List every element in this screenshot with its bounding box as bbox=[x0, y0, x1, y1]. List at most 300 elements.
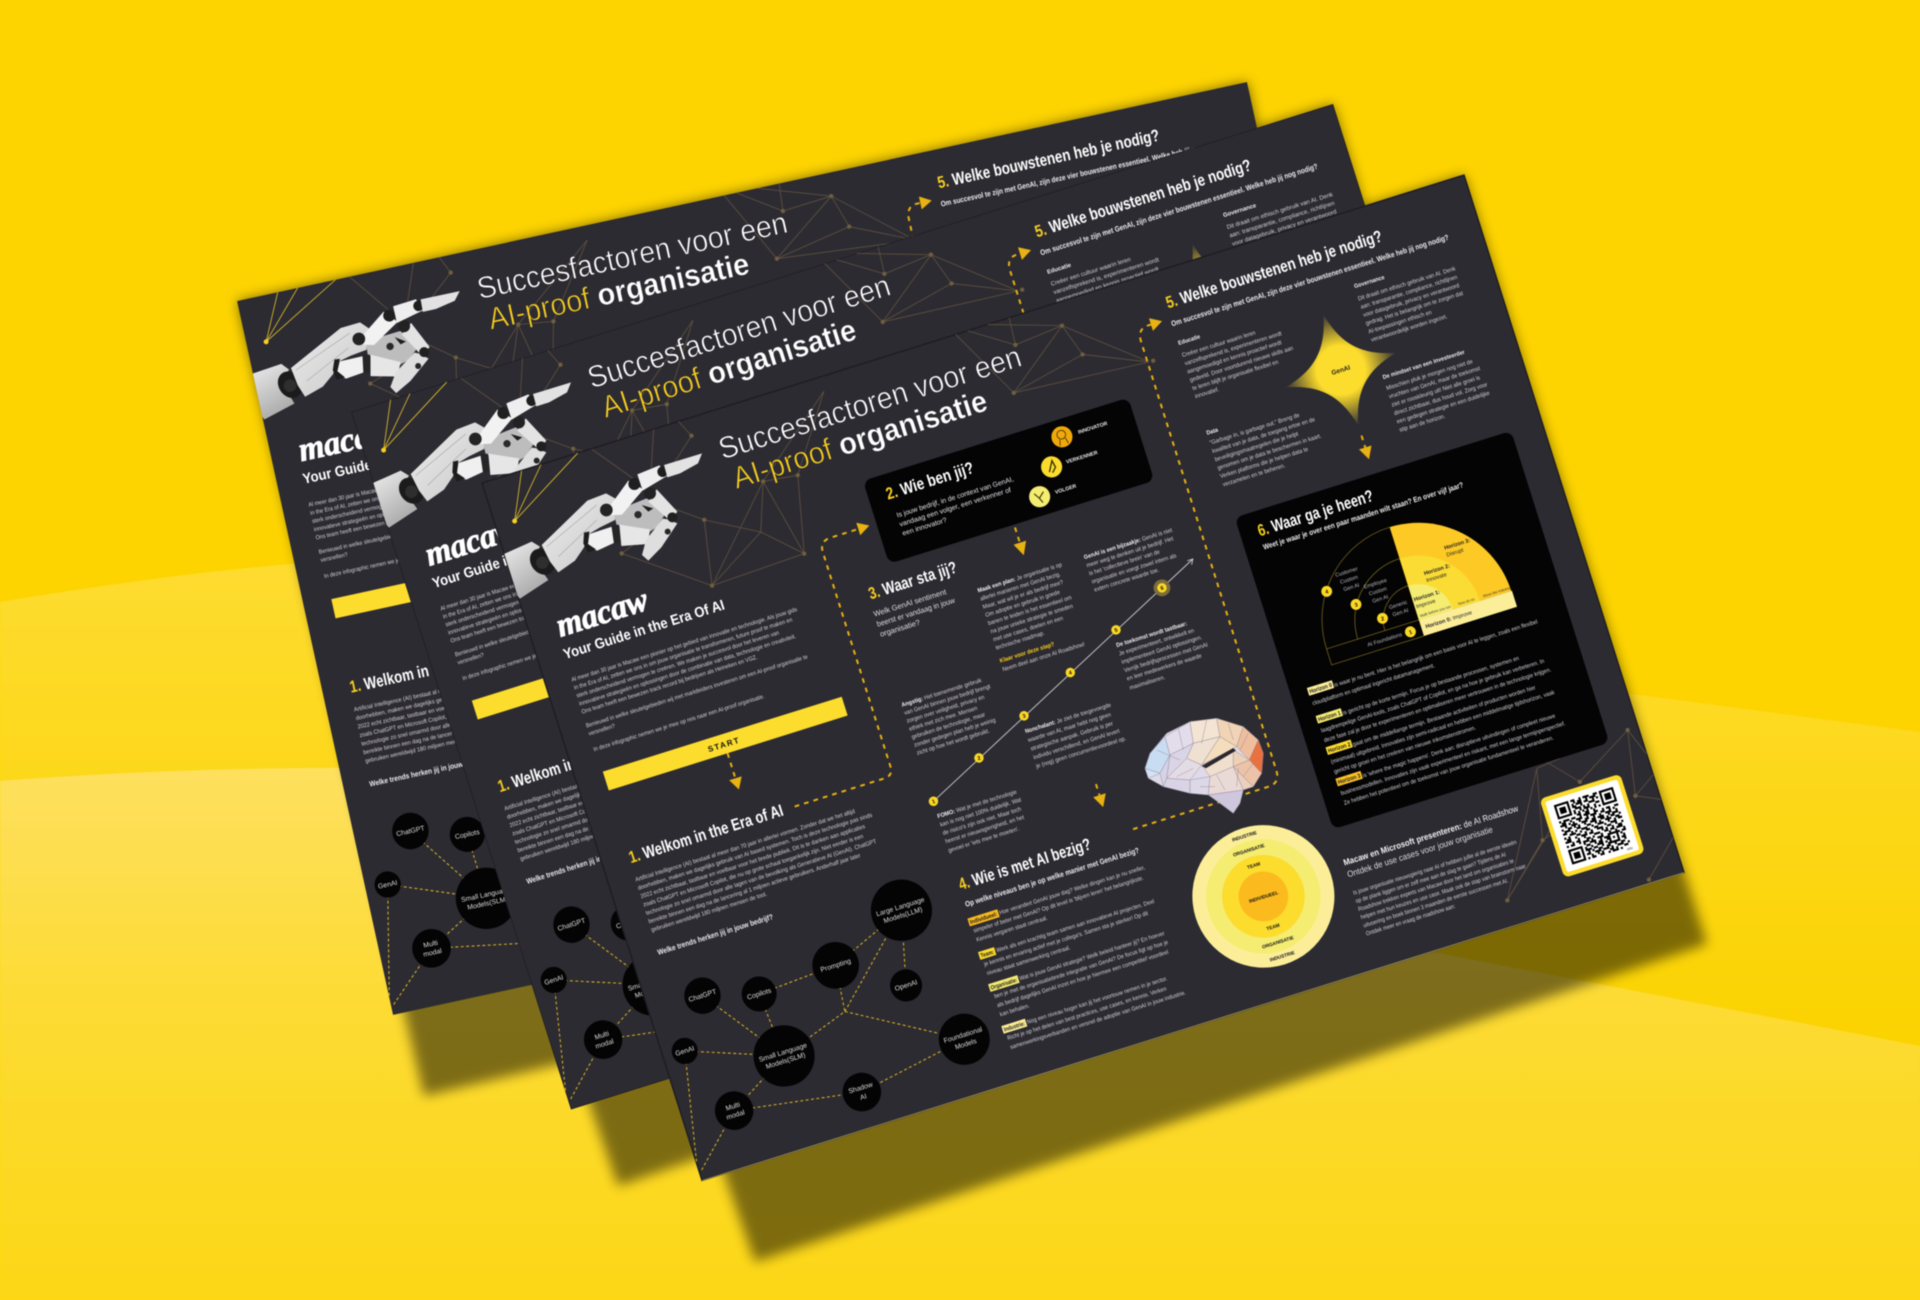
arrow bbox=[906, 196, 932, 236]
start bar: START bbox=[576, 664, 610, 683]
logo and tagline: macaw bbox=[552, 581, 653, 645]
horizon 2 text: Horizon 2 bbox=[1328, 742, 1352, 755]
icon: robot hand bbox=[371, 382, 571, 528]
body text: doorhebben, maken we dagelijks gebruik van AI based systemen. Toch is deze technologie pas sinds bbox=[637, 813, 873, 892]
bubble labels bbox=[653, 892, 992, 1151]
welkom text: Artificial Intelligence (AI) bestaat al meer dan 70 jaar in allerlei vormen. Zonder dat we het altijd bbox=[353, 658, 581, 714]
chart: concentric circles: INDUSTRIE bbox=[1269, 950, 1296, 964]
bubble labels: Shadow bbox=[848, 1081, 875, 1096]
block: educatie: innovatief. bbox=[1194, 387, 1220, 400]
bubble labels: GenAI bbox=[377, 880, 398, 891]
panel: section 6 waar ga je heen bbox=[1235, 431, 1609, 829]
chart: concentric circles: ORGANISATIE bbox=[1232, 843, 1266, 859]
start bar: START bbox=[707, 735, 741, 754]
chart: concentric circles bbox=[1174, 807, 1353, 986]
bubble labels: GenAI bbox=[544, 974, 564, 987]
logo and tagline: Your Guide in the Era Of AI bbox=[430, 527, 596, 592]
question bbox=[872, 585, 960, 639]
educatie and governance text: aangemoedigd en kennis proactief wordt bbox=[1056, 267, 1160, 304]
start bar bbox=[471, 678, 550, 720]
maturity line chart: 1 bbox=[931, 799, 936, 806]
chart: horizons: Horizon 0: Improve bbox=[1425, 610, 1473, 630]
welkom text: technologie zo snel omarmd door alle lagen van de bevolking als Generatieve AI (GenAI). ChatGPT bbox=[361, 690, 600, 748]
text: maak een plan: banen te leiden is het essentieel om bbox=[987, 595, 1073, 627]
welkom text: doorhebben, maken we dagelijks gebruik van AI based systemen. Toch is deze technologie pas sinds bbox=[355, 664, 598, 722]
level: individueel: Individueel: bbox=[969, 912, 998, 926]
horizon 2 text: gericht op groei en het creëren van nieuwe inkomstenstromen. bbox=[1333, 725, 1477, 776]
body text: gebruiken wereldwijd 180 miljoen mensen de tool. bbox=[651, 891, 768, 934]
text: bijzaakje: GenAI is een bijzaakje: GenAI is niet bbox=[1083, 528, 1174, 561]
block: mindset: stip aan de horizon. bbox=[1399, 414, 1447, 434]
educatie and governance text: aan: transparantie, compliance, richtlijnen bbox=[1229, 201, 1336, 239]
arrow: section 1 to section 2 bbox=[719, 519, 943, 807]
title bbox=[588, 280, 891, 418]
text: maak een plan: Maar, wat wil je er als bedrijf mee? bbox=[982, 580, 1064, 611]
level: industrie: Nog een niveau hoger kan jij het voortouw nemen in je sector. bbox=[1026, 976, 1169, 1026]
text: vandaag een volger, een verkenner of bbox=[899, 487, 1012, 529]
heading: 2. Wie ben jij? bbox=[883, 458, 976, 504]
block: data: Verken platforms die je helpen data te bbox=[1220, 447, 1309, 480]
chart: horizons bbox=[1297, 498, 1517, 665]
chart: horizons: Gen AI bbox=[1372, 594, 1389, 605]
text: maak een plan: na jouw unieke strategie te smeden bbox=[990, 604, 1074, 635]
chart: concentric circles: INDIVIDUEEL bbox=[1248, 890, 1279, 905]
block: data: genomen om je data te beschermen in kaart. bbox=[1217, 433, 1323, 472]
qr code bbox=[1539, 774, 1645, 878]
maturity line chart: 3 bbox=[1022, 713, 1027, 720]
text: fomo bbox=[937, 789, 1031, 854]
educatie and governance text: vanzelfsprekend is, experimenteren wordt bbox=[1053, 257, 1160, 296]
bubble labels: GenAI bbox=[675, 1045, 695, 1058]
level: individueel bbox=[967, 863, 1152, 944]
text: fomo: gevoel er 'iets mee te moeten'. bbox=[948, 826, 1021, 854]
star bbox=[1192, 246, 1202, 260]
level: organisatie: Organisatie: bbox=[990, 978, 1018, 992]
title: AI-proof organisatie bbox=[597, 313, 860, 425]
level: organisatie: Wat is jouw GenAI strategie? Welk beleid hanteer jij? En hoever bbox=[1019, 931, 1166, 982]
bubble labels: ChatGPT bbox=[688, 988, 718, 1004]
level: individueel: Hoe verandert GenAI jouw dag? Welke dingen kan je nu sneller, bbox=[999, 865, 1146, 917]
chart: horizons: Generic bbox=[1388, 600, 1408, 611]
bubble labels: modal bbox=[595, 1038, 615, 1051]
icon: robot hand bbox=[502, 453, 702, 599]
intro text: innovatieve strategieën en oplossingen door de combinatie van data, technologie en creativiteit. bbox=[447, 563, 666, 637]
welkom text: gebruiken wereldwijd 180 miljoen mensen de tool. bbox=[365, 733, 485, 765]
block: mindset: vruchten van GenAI, maar de toekomst bbox=[1388, 366, 1481, 400]
text: angstig: zicht op hoe het wordt gebruikt. bbox=[916, 728, 991, 757]
start bar bbox=[603, 697, 848, 790]
intro text: Al meer dan 30 jaar is Macaw een pionier op het gebied van innovatie en technologie. Als jouw gids bbox=[308, 452, 541, 509]
intro text: innovatieve strategieën en oplossingen door de combinatie van data, technologie en creativiteit. bbox=[313, 479, 538, 533]
panel: middle poster bbox=[352, 103, 1366, 1110]
block: governance bbox=[1353, 254, 1470, 344]
intro text: Al meer dan 30 jaar is Macaw een pionier op het gebied van innovatie en technologie. Als jouw gids bbox=[571, 607, 798, 684]
level: organisatie: ben je met de organisatiebrede integratie van GenAI? De focus ligt op hoe je bbox=[994, 940, 1169, 1000]
level: industrie: samenwerkingsverbanden en versnel de adoptie van GenAI in jouw industrie. bbox=[1010, 990, 1187, 1051]
title: AI-proof organisatie bbox=[485, 246, 752, 337]
block: governance: AI-toepassingen ethisch en bbox=[1368, 310, 1433, 336]
chart: horizons: Customer bbox=[1335, 566, 1359, 579]
chart: horizons: Horizon 1: bbox=[1413, 589, 1441, 603]
welkom text: bereikte binnen een dag na de lancering al 1 miljoen actieve gebruikers. Anderhalf jaar later bbox=[517, 782, 731, 854]
bubble labels: Models bbox=[954, 1038, 978, 1051]
text: bijzaakje: is het 'collectieve brein' van de bbox=[1088, 549, 1161, 577]
body text: 2022 echt zichtbaar, tastbaar en voelbaar voor het brede publiek. Dit is te danken aan applicaties bbox=[640, 824, 866, 900]
educatie and governance text: Dit draait om ethisch gebruik van AI. Denk bbox=[1226, 192, 1334, 231]
title bbox=[478, 216, 788, 330]
body text bbox=[635, 804, 887, 934]
text: maak een plan: technische roadmap. bbox=[995, 630, 1046, 652]
intro text: Ons team heeft een bewezen track record bij bedrijven als Heineken en VGZ. bbox=[315, 496, 497, 542]
intro text: versnellen? bbox=[588, 723, 616, 738]
text: fomo: de risico's zijn ook niet. Maar toch bbox=[942, 806, 1022, 837]
bubble labels: Copilots bbox=[746, 987, 773, 1002]
panel: section 4 wie is met AI bezig bbox=[954, 769, 1353, 1052]
chart: horizons: Innovate bbox=[1426, 572, 1448, 584]
bubble labels: Small Language bbox=[758, 1042, 808, 1064]
block: data: kwaliteit van je data, de toegang ertoe en de bbox=[1212, 417, 1316, 455]
trend network links bbox=[642, 904, 979, 1172]
text: maak een plan: met use cases, doelen en een bbox=[992, 616, 1064, 644]
level: industrie: Richt je op het delen van best practices, use cases, en kennis. Verken bbox=[1007, 986, 1167, 1042]
icon: verkenner: VERKENNER bbox=[1065, 450, 1099, 466]
intro text: Benieuwd in welke sleutelgebieden wij met marktleiders investeren om een AI-proof organisatie te bbox=[454, 583, 678, 659]
intro text: Ons team heeft een bewezen track record bij bedrijven als Heineken en VGZ. bbox=[450, 583, 628, 645]
title: Succesfactoren voor een bbox=[474, 205, 791, 306]
level: organisatie bbox=[988, 929, 1175, 1019]
body text: technologie zo snel omarmd door alle lagen van de bevolking als Generatieve AI (GenAI). ChatGPT bbox=[645, 839, 878, 917]
block: data: beveiligingsmaatregelen die je helpt bbox=[1214, 431, 1300, 463]
intro text: Benieuwd in welke sleutelgebieden wij met marktleiders investeren om een AI-proof organisatie te bbox=[585, 654, 809, 730]
welkom text bbox=[504, 784, 594, 862]
bubble labels: modal bbox=[423, 948, 443, 959]
horizon 0 text: Horizon 0 bbox=[1309, 683, 1333, 695]
intro text: In deze infographic nemen we je mee op reis naar een AI-proof organisatie. bbox=[462, 623, 635, 682]
heading: bouwstenen: 5. Welke bouwstenen heb je nodig? bbox=[936, 126, 1161, 192]
bubble labels: Multi bbox=[594, 1030, 610, 1042]
block: governance: aan: transparantie, compliance, richtlijnen bbox=[1360, 275, 1458, 311]
chart: horizons: Disrupt bbox=[1446, 548, 1465, 559]
start bar: START bbox=[438, 575, 472, 591]
roadshow heading: Ontdek de use cases voor jouw organisatie bbox=[1346, 824, 1494, 879]
heading: 4. Wie is met AI bezig? bbox=[956, 835, 1093, 894]
block: governance: Governance bbox=[1353, 275, 1386, 290]
text: bijzaakje: meer weg te denken uit je bedrijf. Het bbox=[1086, 536, 1175, 569]
roadshow body: Ontdek meer en vraag de roadshow aan: bbox=[1365, 904, 1457, 938]
chart: horizons: Custom bbox=[1339, 574, 1359, 586]
icon: innovator bbox=[1049, 412, 1110, 450]
text: een innovator? bbox=[902, 517, 948, 538]
chart: horizons: 3 bbox=[1354, 602, 1359, 609]
bubble labels: Prompting bbox=[820, 958, 852, 974]
block: governance: voor datagebruik, privacy en verantwoord bbox=[1363, 283, 1460, 319]
text: maak een plan bbox=[977, 562, 1088, 673]
question: beerst er vandaag in jouw bbox=[876, 596, 956, 629]
heading: 3. Waar sta jij? bbox=[866, 558, 959, 603]
bubble labels: Small Language bbox=[627, 971, 677, 993]
horizon 0 text: is waar je nu bent. Hier is het belangrijk om een basis voor AI te leggen, zoals een flexibel bbox=[1333, 619, 1539, 689]
roadshow body bbox=[1352, 839, 1532, 938]
heading: 6. Waar ga je heen? bbox=[1255, 486, 1376, 540]
body text: Artificial Intelligence (AI) bestaat al meer dan 70 jaar in allerlei vormen. Zonder dat we het altijd bbox=[635, 809, 856, 884]
block: data: Data bbox=[1206, 427, 1220, 437]
text: angstig: gebruiken de technologie, maar bbox=[911, 712, 986, 741]
poster drop shadows bbox=[237, 82, 1707, 1262]
panel: section 1 welkom bbox=[600, 762, 1003, 1172]
horizon 3 text: is 'where the magic happens'. Denk aan: disruptieve uitvindingen of compleet nieuwe bbox=[1362, 713, 1556, 780]
text: angstig: ethiek met zich mee. Mensen bbox=[908, 706, 978, 733]
text: angstig bbox=[901, 676, 1004, 757]
logo and tagline: macaw bbox=[421, 510, 522, 574]
horizon 0 text: cloudplatform en optimaal ingericht datamanagement. bbox=[1312, 663, 1436, 707]
bubble labels: Multi bbox=[725, 1101, 741, 1113]
title: AI-proof organisatie bbox=[728, 384, 991, 496]
chart: horizons: 2 bbox=[1381, 616, 1385, 623]
maturity line chart bbox=[883, 559, 1240, 807]
text: maak een plan: Neem deel aan onze AI Roadshow! bbox=[1002, 642, 1086, 673]
arrow: start to section 1 bbox=[721, 751, 745, 791]
chart: concentric circles: ORGANISATIE bbox=[1261, 935, 1295, 951]
roadshow body: helpen met hun keuzes en use case. Maak ook de stap van brainstorm naar bbox=[1360, 864, 1527, 921]
level: industrie: Industrie: bbox=[1003, 1021, 1026, 1033]
block: mindset: De mindset van een investeerder bbox=[1382, 349, 1466, 381]
intro text: sterk onderscheidend vermogen te creëren. We maken je succesvol door het leveren van bbox=[445, 559, 649, 629]
text: toekomst: en leer medewerkers de waarde bbox=[1126, 653, 1203, 683]
block: data: "Garbage in, is garbage out." Breng de bbox=[1209, 413, 1301, 447]
icon: robot hand bbox=[246, 273, 460, 436]
level: individueel: simpeler of beter met GenAI? Op dit level is 'blijven leren' het belangrijkste. bbox=[973, 875, 1145, 935]
logo and tagline bbox=[298, 433, 370, 484]
level: organisatie: als bedrijf dagelijks GenAI inzet en hoe je hiermee een competitief voordeel bbox=[996, 950, 1169, 1009]
level: individueel: Kennis vergaren staat centraal. bbox=[976, 915, 1049, 944]
block: governance: verantwoordelijk worden ingezet. bbox=[1370, 314, 1449, 344]
block: data bbox=[1206, 398, 1328, 489]
text: Is jouw bedrijf, in de context van GenAI, bbox=[896, 476, 1015, 519]
text: maak een plan: Maak een plan: Je organisatie is op bbox=[977, 562, 1063, 595]
block: educatie bbox=[1178, 309, 1299, 400]
icon: innovator: INNOVATOR bbox=[1077, 421, 1109, 436]
bubble labels: Large Language bbox=[875, 896, 926, 918]
level: organisatie: kan behalen. bbox=[999, 1003, 1031, 1018]
start bar bbox=[330, 582, 412, 619]
arrow: section 4 to section 5 bbox=[988, 315, 1305, 829]
text: bijzaakje bbox=[1083, 528, 1184, 594]
text: toekomst: De toekomst wordt tastbaar: bbox=[1116, 621, 1188, 649]
intro text: in the Era of AI, zetten we ons in om jouw organisatie te transformeren, future proof te maken en bbox=[573, 617, 793, 692]
educatie and governance text: Governance bbox=[1223, 203, 1258, 219]
text: nonchalant: waarde van AI, maar hebt nog geen bbox=[1026, 712, 1112, 744]
question: organisatie? bbox=[879, 618, 921, 639]
bubble labels: Models(LLM) bbox=[883, 906, 923, 925]
level: team: Team: bbox=[980, 950, 995, 960]
bubble labels: Models(SLM) bbox=[467, 896, 509, 912]
block: educatie: vanzelfsprekend is, experimenteren wordt bbox=[1184, 331, 1283, 367]
text: nonchalant bbox=[1024, 701, 1127, 770]
bubble labels: Models(SLM) bbox=[765, 1052, 806, 1071]
bubble labels: Foundational bbox=[943, 1026, 984, 1045]
chart: concentric circles: INDUSTRIE bbox=[1231, 830, 1259, 844]
text: nonchalant: individu verschillend, en GenAI levert bbox=[1033, 728, 1121, 761]
bubble labels: Copilots bbox=[454, 829, 481, 841]
arrow: section 3 to section 4 bbox=[1090, 782, 1109, 809]
intro text: Al meer dan 30 jaar is Macaw een pionier op het gebied van innovatie en technologie. Als jouw gids bbox=[440, 536, 667, 613]
text: toekomst: maximaliseren. bbox=[1129, 675, 1166, 692]
block: educatie: gedeeld. Door voortdurend nieuwe skills aan bbox=[1189, 346, 1294, 384]
bouwstenen sub: Om succesvol te zijn met GenAI, zijn deze vier bouwstenen essentieel. Welke heb jij nog nodig? bbox=[1039, 162, 1319, 257]
welkom text: zoals ChatGPT en Microsoft Copilot, die nu op grote schaal toegankelijk zijn. Niet eerder is een bbox=[359, 684, 587, 739]
text: toekomst: Je experimenteert, ontwikkelt en bbox=[1118, 628, 1195, 658]
block: educatie: te leren blijft je organisatie flexibel en bbox=[1192, 359, 1279, 392]
horizon 3 text: Horizon 3 bbox=[1337, 773, 1362, 786]
title: Succesfactoren voor een bbox=[715, 340, 1026, 466]
heading: 5. Welke bouwstenen heb je nodig? bbox=[1163, 227, 1385, 312]
intro text: Ons team heeft een bewezen track record bij bedrijven als Heineken en VGZ. bbox=[581, 654, 759, 716]
block: data: verzamelen en te beheren. bbox=[1222, 463, 1287, 489]
trends question: Welke trends herken jij in jouw bedrijf? bbox=[369, 754, 489, 789]
block: mindset: Misschien pluk je morgen nog niet de bbox=[1386, 359, 1474, 392]
bubble labels: Multi bbox=[423, 940, 439, 950]
text: toekomst: Verrijk bedrijfsprocessen met GenAI bbox=[1124, 642, 1209, 674]
text: bijzaakje: extern concrete waarde toe. bbox=[1094, 567, 1161, 594]
horizon 3 text: businessmodellen. Innovaties zijn vaak experimenteel en riskant, met een lange termijnperspectief. bbox=[1340, 721, 1567, 797]
level: team: niveau staat samenwerking centraal. bbox=[986, 945, 1072, 977]
horizon 1 text: is gericht op de korte termijn. Focus je op bestaande processen, systemen en bbox=[1342, 656, 1520, 717]
bubble labels: modal bbox=[726, 1109, 746, 1122]
welkom text: gebruiken wereldwijd 180 miljoen mensen de tool. bbox=[520, 820, 637, 863]
horizon 0 text bbox=[1307, 616, 1542, 708]
block: mindset: direct zichtbaar, dus houd vol. Zorg voor bbox=[1394, 382, 1488, 417]
welkom text: 2022 echt zichtbaar, tastbaar en voelbaar voor het brede publiek. Dit is te danken aan applicaties bbox=[509, 753, 735, 829]
text: angstig: zorgen over veiligheid, privacy en bbox=[906, 695, 985, 725]
icon: volger: VOLGER bbox=[1054, 483, 1077, 496]
chart: horizons: Improve bbox=[1416, 599, 1436, 610]
panel: section 3 waar sta jij bbox=[861, 490, 1256, 856]
welkom text: technologie zo snel omarmd door alle lagen van de bevolking als Generatieve AI (GenAI). ChatGPT bbox=[514, 768, 747, 846]
maturity line chart: 4 bbox=[1068, 670, 1074, 677]
welkom text: Artificial Intelligence (AI) bestaat al meer dan 70 jaar in allerlei vormen. Zonder dat we het altijd bbox=[504, 738, 725, 813]
intro text: sterk onderscheidend vermogen te creëren. We maken je succesvol door het leveren van bbox=[312, 474, 521, 525]
logo and tagline: macaw bbox=[295, 413, 396, 469]
text: maak een plan: Klaar voor deze stap? bbox=[999, 642, 1056, 665]
text: nonchalant: strategische aanpak. Gebruik is per bbox=[1030, 721, 1114, 753]
block: educatie: Creëer een cultuur waarin leren bbox=[1181, 330, 1256, 359]
level: team bbox=[978, 897, 1161, 978]
qr code: tally bbox=[1627, 846, 1634, 851]
heading: 1. Welkom in the Era of AI bbox=[626, 801, 786, 867]
bubble labels: AI bbox=[859, 1093, 868, 1102]
welkom text: doorhebben, maken we dagelijks gebruik van AI based systemen. Toch is deze technologie pas sinds bbox=[506, 742, 742, 821]
educatie and governance text: Creëer een cultuur waarin leren bbox=[1050, 257, 1132, 288]
text: bijzaakje: organisatie en voegt zowel intern als bbox=[1091, 553, 1178, 586]
text: angstig: van GenAI binnen jouw bedrijf brengt bbox=[903, 684, 992, 717]
educatie and governance text: Educatie bbox=[1047, 263, 1073, 276]
text: toekomst bbox=[1116, 617, 1215, 692]
intro text bbox=[308, 488, 399, 578]
text: toekomst: implementeert GenAI oplossingen. bbox=[1121, 635, 1203, 666]
body text: zoals ChatGPT en Microsoft Copilot, die nu op grote schaal toegankelijk zijn. Niet eerder is een bbox=[643, 834, 864, 909]
chart: horizons: AI Foundations bbox=[1367, 632, 1403, 649]
text: fomo: FOMO: Wat je met de technologie bbox=[937, 789, 1018, 820]
intro text: In deze infographic nemen we je mee op reis naar een AI-proof organisatie. bbox=[593, 694, 766, 753]
educatie and governance text: voor datagebruik, privacy en verantwoord bbox=[1232, 209, 1338, 248]
maturity line chart: 2 bbox=[977, 756, 982, 762]
chart: horizons: 4 bbox=[1325, 589, 1330, 596]
welkom text: zoals ChatGPT en Microsoft Copilot, die nu op grote schaal toegankelijk zijn. Niet eerder is een bbox=[512, 763, 733, 838]
horizon 1 text: deze fase zal je door te experimenteren en optimaliseren meer vertrouwen in de technologie krijgen. bbox=[1323, 667, 1553, 744]
block: mindset bbox=[1382, 346, 1494, 434]
horizon 2 text: (minimaal) uitgebreid. Innovaties zijn semi-radicaal en hebben een middelmatige tijdshorizon, vaak bbox=[1330, 690, 1556, 766]
panel: rear poster bbox=[236, 82, 1258, 1016]
chart: horizons: Employee bbox=[1363, 578, 1388, 591]
bubble labels: OpenAI bbox=[894, 979, 919, 993]
text: angstig: Angstig: Het toenemende gebruik bbox=[901, 678, 983, 709]
bubble labels: ChatGPT bbox=[396, 825, 426, 838]
intro text bbox=[440, 584, 536, 681]
welkom text bbox=[354, 689, 456, 764]
bubble labels bbox=[378, 824, 506, 958]
maturity line chart: 5 bbox=[1114, 627, 1119, 634]
arrow: section 5 to section 6 bbox=[1355, 434, 1375, 461]
logo and tagline: Your Guide in the Era Of AI bbox=[301, 436, 470, 488]
chart: horizons: Gen AI bbox=[1343, 583, 1360, 593]
chart: horizons: Custom bbox=[1368, 586, 1388, 598]
question: Welke trends herken jij in jouw bedrijf? bbox=[656, 912, 775, 957]
roadshow body: Is jouw organisatie nieuwsgierig naar AI of hebben jullie al de eerste ideeën bbox=[1352, 840, 1518, 897]
title: Succesfactoren voor een bbox=[584, 269, 895, 395]
trends question: Welke trends herken jij in jouw bedrijf? bbox=[525, 841, 644, 886]
intro text: Benieuwd in welke sleutelgebieden wij met marktleiders investeren om een AI-proof organisatie te bbox=[318, 500, 547, 556]
text: fomo: kan is nog niet 100% duidelijk. Wat bbox=[939, 797, 1023, 829]
intro text: versnellen? bbox=[457, 652, 485, 667]
sub heading: Om succesvol te zijn met GenAI, zijn deze vier bouwstenen essentieel. Welke heb jij nog nodig? bbox=[1170, 233, 1450, 328]
roadshow body: uitvoering en boek binnen 3 maanden de eerste successen met AI. bbox=[1363, 878, 1510, 930]
panel: section 5 bouwstenen bbox=[1162, 208, 1501, 489]
heading: welkom: 1. Welkom in the Era of AI bbox=[495, 730, 655, 796]
arrow: section 2 to section 3 bbox=[1009, 525, 1030, 557]
welkom text: bereikte binnen een dag na de lancering al 1 miljoen actieve gebruikers. Anderhalf jaar later bbox=[363, 703, 582, 756]
intro text: sterk onderscheidend vermogen te creëren. We maken je succesvol door het leveren van bbox=[576, 630, 780, 700]
intro text bbox=[571, 607, 820, 753]
educatie and governance text bbox=[1046, 192, 1337, 302]
icon: low-poly brain bbox=[1145, 718, 1263, 813]
icon: genai star bbox=[1268, 297, 1414, 443]
bubble labels: ChatGPT bbox=[557, 917, 587, 933]
logo and tagline: Your Guide in the Era Of AI bbox=[561, 598, 727, 663]
logo and tagline bbox=[425, 528, 508, 588]
block: governance: Dit draait om ethisch gebruik van AI. Denk bbox=[1357, 266, 1457, 303]
text: nonchalant: je (nog) geen concurrentievoordeel op. bbox=[1035, 736, 1127, 770]
horizon 2 text: gaat om de middellange termijn. Bestaande activiteiten of producten worden hier bbox=[1352, 685, 1537, 748]
trend network bubbles bbox=[642, 867, 1000, 1161]
intro text: in the Era of AI, zetten we ons in om jouw organisatie te transformeren, future proof te maken en bbox=[310, 462, 535, 517]
text: maak een plan: Om adoptie en gebruik in goede bbox=[985, 590, 1061, 619]
heading: welkom: 1. Welkom in the Era of AI bbox=[348, 644, 510, 697]
chart: horizons: 1 bbox=[1408, 630, 1413, 636]
horizon 1 text: Horizon 1 bbox=[1318, 710, 1342, 723]
level: team: Werk als een krachtig team samen aan innovatieve AI projecten. Deel bbox=[996, 899, 1155, 954]
intro text: in the Era of AI, zetten we ons in om jouw organisatie te transformeren, future proof te maken en bbox=[442, 546, 662, 621]
panel: front poster bbox=[460, 154, 1684, 1185]
sub heading: Op welke niveaus ben je op welke manier met GenAI bezig? bbox=[964, 846, 1140, 909]
chart: horizons: Gen AI bbox=[1392, 608, 1409, 618]
bubble labels bbox=[544, 917, 644, 1050]
welkom text: 2022 echt zichtbaar, tastbaar en voelbaar voor het brede publiek. Dit is te danken aan applicaties bbox=[357, 674, 590, 731]
panel: section 2 wie ben jij bbox=[863, 398, 1154, 564]
block: governance: gedrag. Het is belangrijk om te zorgen dat bbox=[1365, 291, 1464, 327]
panel: roadshow bbox=[1342, 771, 1645, 940]
question: Welk GenAI sentiment bbox=[872, 587, 948, 619]
icon: volger bbox=[1026, 475, 1079, 510]
